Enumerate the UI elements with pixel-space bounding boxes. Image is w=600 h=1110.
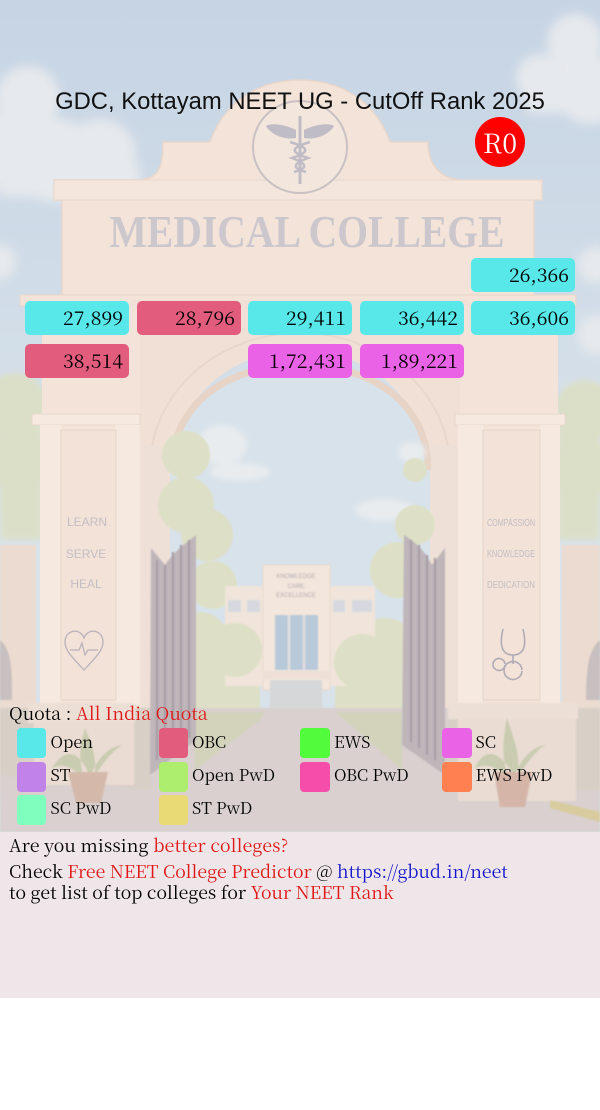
central building: KNOWLEDGE [276, 574, 316, 580]
cutoff chips [25, 258, 575, 378]
title: GDC, Kottayam NEET UG - CutOff Rank 2025 [55, 88, 545, 115]
chip: Open 36,606: 36,606 [509, 303, 569, 331]
legend label: EWS: EWS [334, 729, 370, 753]
legend swatch: ST PwD [158, 795, 188, 825]
right pier [455, 305, 565, 705]
sky [0, 0, 600, 832]
cornice band [20, 295, 576, 306]
legend swatch: SC PwD [16, 795, 46, 825]
legend label: SC PwD: SC PwD [50, 795, 111, 819]
chip: OBC 28,796: 28,796 [175, 303, 235, 331]
chip: Open 36,442 [360, 301, 464, 335]
round badge R0: R0 [483, 122, 517, 161]
left pier [32, 305, 140, 705]
chip: Open 26,366 [471, 258, 575, 292]
central building: CARE [288, 584, 304, 590]
quota heading: Quota : All India Quota [9, 701, 208, 726]
trees inside arch [158, 431, 435, 710]
legend label: ST PwD: ST PwD [192, 795, 252, 819]
legend swatch: SC [442, 728, 472, 758]
legend swatch: EWS [300, 728, 330, 758]
right pier: COMPASSION [487, 518, 535, 529]
legend label: Open: Open [50, 729, 93, 753]
promo line 3: to get list of top colleges for Your NEET Rank [9, 880, 394, 905]
clouds [0, 14, 600, 355]
icon: stethoscope [493, 629, 525, 680]
central building [208, 565, 390, 708]
legend label: SC: SC [476, 729, 496, 753]
arch clouds [197, 425, 426, 521]
left pier: LEARN [67, 515, 107, 529]
chip: Open 27,899 [25, 301, 129, 335]
legend swatch: ST [16, 762, 46, 792]
background illustration: medical college gate [0, 0, 600, 832]
right pier: DEDICATION [487, 580, 535, 591]
legend swatch: OBC PwD [300, 762, 330, 792]
left pier: HEAL [70, 577, 102, 591]
left pier: SERVE [66, 547, 106, 561]
chip: Open 29,411 [248, 301, 352, 335]
chip: SC 1,89,221 [360, 344, 464, 378]
legend label: ST: ST [50, 762, 70, 786]
chip: SC 1,72,431: 1,72,431 [269, 346, 346, 374]
emblem: caduceus [253, 101, 347, 193]
legend [17, 728, 552, 825]
chip: OBC 38,514 [25, 344, 129, 378]
potted plants [52, 718, 548, 807]
legend swatch: Open [16, 728, 46, 758]
iron gates [150, 535, 445, 775]
chip: SC 1,89,221: 1,89,221 [381, 346, 458, 374]
legend label: EWS PwD: EWS PwD [476, 762, 552, 786]
chip: Open 36,442: 36,442 [398, 303, 458, 331]
gate heading text: MEDICAL COLLEGE [110, 206, 504, 257]
promo line 2: Check Free NEET College Predictor @ https://gbud.in/neet [9, 859, 508, 884]
chip: OBC 28,796 [137, 301, 241, 335]
chip: SC 1,72,431 [248, 344, 352, 378]
promo line 1: Are you missing better colleges? [9, 833, 288, 858]
chip: Open 27,899: 27,899 [63, 303, 123, 331]
legend swatch: Open PwD [158, 762, 188, 792]
side walls [0, 545, 600, 795]
central building: EXCELLENCE [276, 593, 316, 599]
side trees [0, 373, 600, 540]
chip: OBC 38,514: 38,514 [63, 346, 123, 374]
promo panel [0, 832, 600, 998]
road and forecourt [0, 703, 600, 832]
legend label: Open PwD: Open PwD [192, 762, 275, 786]
legend swatch: EWS PwD [442, 762, 472, 792]
legend label: OBC PwD: OBC PwD [334, 762, 409, 786]
right pier: KNOWLEDGE [487, 549, 535, 560]
icon: heart [65, 631, 103, 670]
legend swatch: OBC [158, 728, 188, 758]
legend label: OBC: OBC [192, 729, 226, 753]
round badge R0 [475, 117, 525, 167]
chip: Open 36,606 [471, 301, 575, 335]
gate upper section [54, 80, 542, 340]
chip: Open 26,366: 26,366 [509, 260, 569, 288]
chip: Open 29,411: 29,411 [286, 303, 346, 331]
arch [130, 300, 470, 720]
